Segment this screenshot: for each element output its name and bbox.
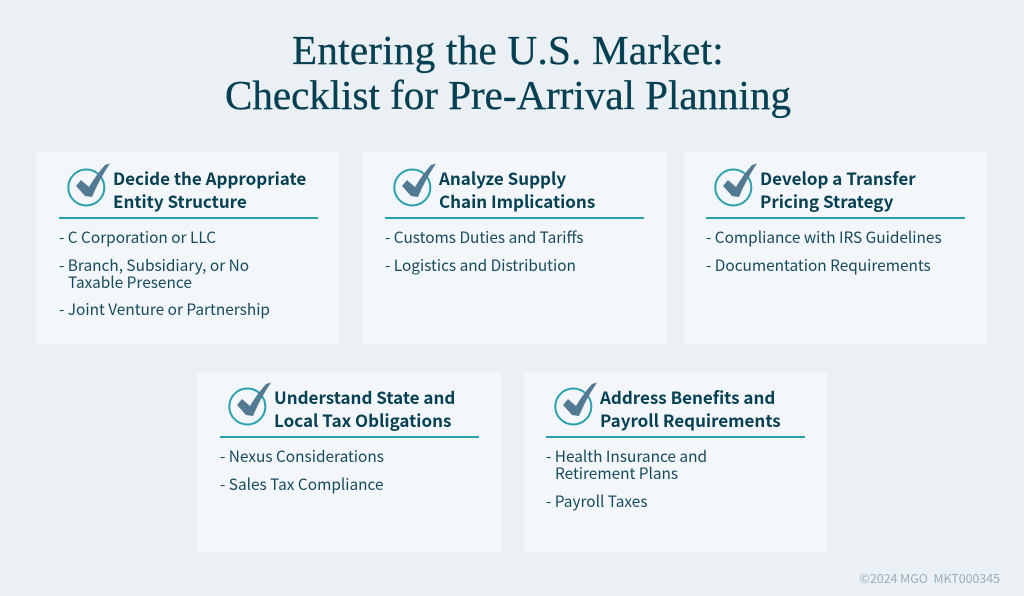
icon: check 5: [554, 382, 597, 426]
list item: - Sales Tax Compliance: [220, 473, 384, 495]
panel: state and local tax: [197, 372, 501, 552]
list item: - Payroll Taxes: [546, 490, 648, 512]
heading: transfer pricing: Pricing Strategy: [760, 188, 893, 212]
heading: supply chain: Analyze Supply: [439, 165, 566, 190]
panel: benefits and payroll: [524, 372, 827, 552]
title: Checklist for Pre-Arrival Planning: [225, 72, 791, 118]
list item: - C Corporation or LLC: [59, 226, 216, 248]
heading: state and local tax: [274, 384, 455, 432]
panel: supply chain: [363, 152, 666, 344]
icon: check 2: [393, 164, 436, 206]
title: [225, 27, 791, 118]
heading: state and local tax: Local Tax Obligations: [274, 406, 451, 432]
heading: entity structure: Entity Structure: [113, 188, 247, 212]
list item: - Nexus Considerations: [220, 445, 384, 467]
list item: [546, 445, 707, 484]
heading: state and local tax: Understand State and: [274, 384, 455, 409]
heading: transfer pricing: [760, 165, 916, 212]
heading: entity structure: [113, 165, 306, 212]
icon: check 3: [714, 164, 757, 206]
icon: check 1: [67, 164, 110, 206]
title: Entering the U.S. Market:: [292, 27, 724, 73]
icon: check 4: [228, 382, 271, 426]
panel: entity structure: [36, 152, 339, 344]
panel: transfer pricing: [684, 152, 987, 344]
heading: transfer pricing: Develop a Transfer: [760, 165, 916, 190]
list item: - Joint Venture or Partnership: [59, 298, 270, 320]
heading: supply chain: [439, 165, 595, 212]
list item: - Documentation Requirements: [706, 254, 931, 276]
list item: - Customs Duties and Tariffs: [385, 226, 584, 248]
list item: [59, 254, 249, 293]
heading: benefits and payroll: Address Benefits and: [600, 384, 775, 409]
list item: - Compliance with IRS Guidelines: [706, 226, 942, 248]
heading: supply chain: Chain Implications: [439, 188, 595, 212]
footer credit: ©2024 MGO MKT000345: [860, 569, 1000, 587]
heading: benefits and payroll: [600, 384, 781, 432]
list item: Retirement Plans: [555, 462, 678, 484]
list item: - Logistics and Distribution: [385, 254, 576, 276]
list item: Taxable Presence: [68, 271, 192, 293]
heading: entity structure: Decide the Appropriate: [113, 165, 306, 190]
list item: - Health Insurance and: [546, 445, 707, 467]
list item: - Branch, Subsidiary, or No: [59, 254, 249, 276]
heading: benefits and payroll: Payroll Requirements: [600, 406, 781, 432]
